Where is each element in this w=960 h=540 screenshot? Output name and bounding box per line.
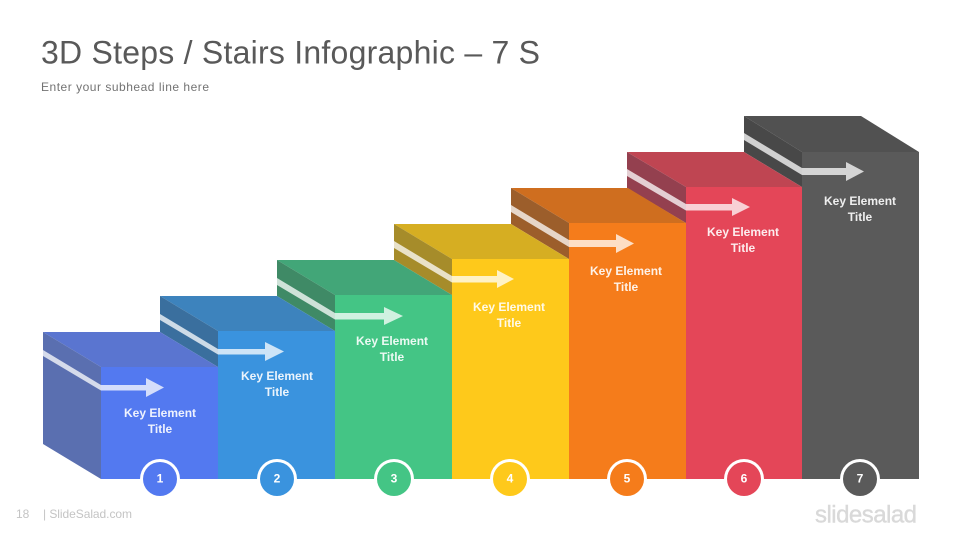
title: 3D Steps / Stairs Infographic – 7 S: [41, 34, 540, 70]
arrow 7: [744, 133, 864, 181]
number badge 3: 3: [391, 472, 398, 486]
number badge 7: 7: [857, 472, 864, 486]
step 5: [511, 188, 686, 479]
label 7: Key Element: [824, 194, 896, 208]
label 1: Key Element: [124, 406, 196, 420]
number badge 6: [724, 459, 764, 499]
arrow 4: [394, 241, 514, 288]
number badge 2: [257, 459, 297, 499]
arrow 5: [511, 205, 634, 253]
number badge 7: [840, 459, 880, 499]
label 7: Title: [848, 210, 873, 224]
label 5: Key Element: [590, 264, 662, 278]
footer site name: | SlideSalad.com: [43, 507, 132, 521]
number badge 6: 6: [741, 472, 748, 486]
number badge 4: [490, 459, 530, 499]
brand logo: slidesalad: [815, 502, 917, 528]
label 5: Title: [614, 280, 639, 294]
label 3: Title: [380, 350, 405, 364]
arrow 2: [160, 314, 284, 361]
step 7: [744, 116, 919, 479]
label 4: Title: [497, 316, 522, 330]
step 1: [43, 332, 218, 479]
number badge 5: 5: [624, 472, 631, 486]
arrow 3: [277, 278, 403, 325]
label 3: Key Element: [356, 334, 428, 348]
label 2: Key Element: [241, 369, 313, 383]
page number: 18: [16, 507, 30, 521]
arrow 1: [43, 350, 164, 397]
label 4: Key Element: [473, 300, 545, 314]
label 2: Title: [265, 385, 290, 399]
label 6: Title: [731, 241, 756, 255]
number badge 3: [374, 459, 414, 499]
step 6: [627, 152, 802, 479]
number badge 5: [607, 459, 647, 499]
step 3: [277, 260, 452, 479]
arrow 6: [627, 169, 750, 216]
step 2: [160, 296, 335, 479]
number badge 4: 4: [507, 472, 514, 486]
number badge 1: 1: [157, 472, 164, 486]
step 4: [394, 224, 569, 479]
number badge 2: 2: [274, 472, 281, 486]
number badge 1: [140, 459, 180, 499]
label 1: Title: [148, 422, 173, 436]
label 6: Key Element: [707, 225, 779, 239]
subhead: Enter your subhead line here: [41, 80, 209, 94]
